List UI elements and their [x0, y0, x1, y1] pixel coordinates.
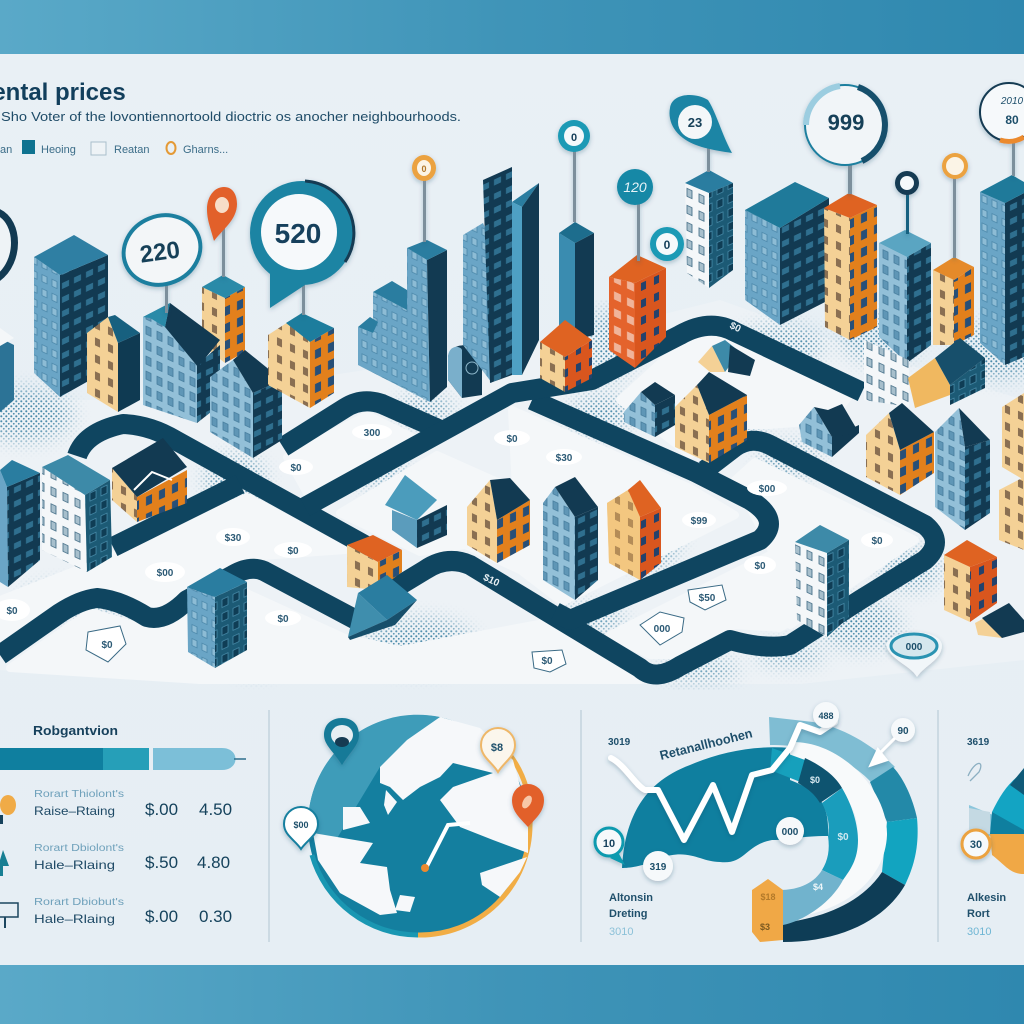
- value badge middle: 000: [782, 827, 799, 838]
- pie caption: 3010: [967, 926, 991, 938]
- panel: rate table: [0, 723, 246, 928]
- building: blue tower edge: [980, 175, 1024, 365]
- parcel price labels: $0: [277, 614, 289, 625]
- parcel price labels: $0: [541, 656, 553, 667]
- value badge middle: [776, 817, 804, 845]
- pie caption: Rort: [967, 908, 990, 920]
- map pin orange: [512, 784, 544, 827]
- row 1: [0, 789, 232, 824]
- row 2: $.50: [145, 853, 178, 872]
- pin: 0 orange small: 0: [421, 164, 427, 174]
- row 3: Rorart Dbiobut's: [34, 897, 124, 908]
- parcel price labels: $0: [871, 536, 883, 547]
- land parcels: [0, 330, 915, 680]
- map pin 000: [284, 807, 318, 849]
- pin: dark ring: [895, 171, 919, 234]
- parcel price labels: 000: [654, 624, 671, 635]
- route start marker: [421, 864, 429, 872]
- row 1: Raise–Rtaing: [34, 804, 115, 818]
- bottom band: [0, 965, 1024, 1024]
- pin: 0 teal small: 0: [571, 132, 577, 144]
- legend: Heoing: [41, 144, 76, 156]
- pin: orange marker: [207, 187, 237, 277]
- parcel price labels: $0: [506, 434, 518, 445]
- pin: yellow ring: [942, 153, 968, 258]
- buildings: back row left: [0, 167, 1024, 458]
- parcel price labels: $0: [287, 546, 299, 557]
- pin: 520 bubble: [250, 181, 354, 315]
- donut chart: $0: [810, 775, 820, 785]
- building: yellow house with orange side: [268, 313, 334, 408]
- value badge lower: [643, 851, 673, 881]
- parcel price labels: $10: [481, 572, 501, 589]
- building: orange right: [944, 540, 997, 622]
- map pin 50: [481, 728, 515, 772]
- value badge 10: 10: [603, 838, 615, 850]
- building: blue tall centre: [543, 477, 598, 600]
- building: stepped blue towers: [358, 240, 447, 402]
- building: white apartment: [42, 455, 112, 572]
- donut chart: $3: [760, 922, 770, 932]
- building: white and dark tower: [685, 170, 733, 288]
- row 2: 4.80: [197, 853, 230, 872]
- building: blue left edge: [0, 460, 40, 587]
- small icon: [968, 763, 981, 781]
- stacked bar: [0, 748, 246, 770]
- panel: partial pie: [962, 737, 1024, 938]
- pin: 220 bubble: 220: [138, 236, 182, 269]
- route: [425, 823, 470, 870]
- building: orange and yellow tower right: [824, 193, 877, 340]
- map pin 50: $8: [491, 742, 503, 754]
- building: orange yellow centre: [607, 480, 661, 580]
- top band: [0, 0, 1024, 54]
- parcel price labels: $30: [225, 533, 242, 544]
- teal area: [622, 747, 828, 868]
- building: left edge block: [0, 328, 14, 412]
- ring landmark bottom right: 000: [906, 642, 923, 653]
- pin: left ring fragment: [0, 212, 14, 278]
- white trend line: [611, 722, 835, 840]
- parcel price labels: $0: [728, 320, 743, 335]
- house: blue: [624, 382, 675, 437]
- chart caption: Dreting: [609, 908, 648, 920]
- pin: 120: 120: [623, 179, 647, 195]
- row 3: Hale–Rlaing: [34, 912, 115, 926]
- parcel price labels: $99: [691, 516, 708, 527]
- pin: 0 teal small: [558, 120, 590, 222]
- building: blue house front: [210, 350, 282, 458]
- building: blue tower right: [879, 230, 931, 363]
- ring orange: [418, 755, 530, 935]
- buildings: middle row: [0, 340, 1024, 587]
- parcel price labels: $0: [101, 640, 113, 651]
- house: orange small: [347, 535, 402, 590]
- house: small rear gable: [698, 340, 755, 376]
- panel: world map: [284, 715, 544, 935]
- pin: top right bubble: 80: [1005, 113, 1019, 127]
- donut chart: $18: [760, 892, 776, 902]
- building: orange house: [540, 320, 592, 392]
- pin: 0 bubble mid: [650, 227, 684, 261]
- value badge lower: 319: [650, 862, 667, 873]
- parcel price labels: $00: [759, 484, 776, 495]
- pin: 120: [617, 169, 653, 261]
- chart heading: Retanallhoohen: [658, 725, 754, 763]
- year label: 3619: [967, 737, 990, 748]
- road network: [0, 326, 935, 675]
- building: front blue block: [187, 568, 247, 668]
- donut chart: $4: [813, 882, 823, 892]
- chart caption: [609, 892, 653, 938]
- house: blue small right: [799, 404, 859, 457]
- pin: top right bubble: [980, 83, 1024, 176]
- chart caption: 3010: [609, 926, 633, 938]
- map pin 000: $00: [293, 820, 309, 830]
- house: corner right: [975, 603, 1024, 638]
- buildings: centre row: [187, 475, 1024, 677]
- value badge 00: 30: [970, 839, 982, 851]
- row 1: Rorart Thiolont's: [34, 789, 124, 800]
- pin: 0 bubble mid: 0: [664, 238, 671, 252]
- building: white block: [864, 340, 909, 407]
- house: yellow right: [866, 403, 934, 495]
- chart caption: Altonsin: [609, 892, 653, 904]
- donut chart: [752, 717, 918, 942]
- building: orange and yellow tower: [202, 275, 245, 363]
- legend: Reatan: [114, 144, 149, 156]
- building: dark roof house: [908, 338, 985, 408]
- building: blue gabled house: [143, 303, 220, 423]
- house: blue front: [348, 575, 417, 640]
- donut chart: $0: [837, 832, 849, 843]
- parcel price labels: $00: [157, 568, 174, 579]
- ring teal: [312, 855, 418, 935]
- pie caption: [967, 892, 1006, 938]
- map ground: [0, 300, 1024, 690]
- row 1: $.00: [145, 800, 178, 819]
- building: slim blue tower: [559, 222, 594, 340]
- building: yellow house: [87, 315, 140, 412]
- row 2: [0, 843, 230, 876]
- row 3: [0, 897, 232, 928]
- parcel price labels: 300: [364, 428, 381, 439]
- legend: [0, 140, 228, 156]
- building: tall blue block: [34, 235, 108, 397]
- house: blue centre: [385, 475, 447, 548]
- house: yellow: [675, 372, 747, 463]
- value badge arrow: [871, 718, 915, 765]
- building: orange tower: [609, 255, 666, 368]
- value badge top: 488: [818, 711, 834, 721]
- panel heading: Robgantvion: [33, 723, 118, 738]
- building: yellow tower right: [933, 257, 974, 345]
- ring landmark bottom right: [886, 632, 942, 677]
- pin: 23 marker: 23: [688, 115, 702, 130]
- parcel price labels: $50: [699, 593, 716, 604]
- pin: 520 bubble: 520: [275, 218, 321, 249]
- parcel price labels: $0: [754, 561, 766, 572]
- parcel price labels: $0: [6, 606, 18, 617]
- land: [313, 717, 528, 915]
- pin: top right bubble: 2010: [1000, 96, 1024, 107]
- pin: 999 bubble: 999: [828, 110, 864, 135]
- legend: an: [0, 144, 12, 156]
- parcel price labels: $30: [556, 453, 573, 464]
- parcel price labels: [0, 320, 893, 672]
- building: blue tall right: [935, 408, 990, 530]
- pin: 0 orange small: [412, 155, 436, 242]
- value badge 10: [595, 828, 625, 865]
- subtitle: Sho Voter of the lovontiennortoold dioctric os anocher neighbourhoods.: [1, 109, 461, 124]
- building: tall dark tower: [463, 167, 539, 383]
- pin: 220 bubble: [113, 204, 211, 313]
- building: big blue block: [745, 182, 829, 325]
- globe: [308, 715, 528, 935]
- value badge top: [813, 702, 839, 728]
- parcel price labels: $0: [290, 463, 302, 474]
- pie slices: [969, 768, 1024, 874]
- building: yellow right edge: [999, 393, 1024, 550]
- building: small dome kiosk: [448, 345, 482, 398]
- pin: 999 bubble: [805, 85, 885, 194]
- upper ocean tint: [308, 715, 440, 850]
- house: yellow centre: [467, 478, 530, 563]
- year label: 3019: [608, 737, 631, 748]
- row 3: $.00: [145, 907, 178, 926]
- building: white blue tower: [795, 525, 849, 637]
- row 3: 0.30: [199, 907, 232, 926]
- house: yellow orange gable: [112, 438, 187, 522]
- row 1: 4.50: [199, 800, 232, 819]
- pie caption: Alkesin: [967, 892, 1006, 904]
- price pins: [0, 83, 1024, 315]
- map pin teal: [324, 718, 359, 765]
- value badge 00: [962, 830, 990, 858]
- row 2: Hale–Rlaing: [34, 858, 115, 872]
- pin: 23 marker: [670, 95, 732, 172]
- legend: Gharns...: [183, 144, 228, 156]
- panel: line and donut chart: [595, 702, 918, 942]
- row 2: Rorart Dbiolont's: [34, 843, 124, 854]
- value badge arrow: 90: [897, 726, 909, 737]
- divider lines: [269, 710, 938, 942]
